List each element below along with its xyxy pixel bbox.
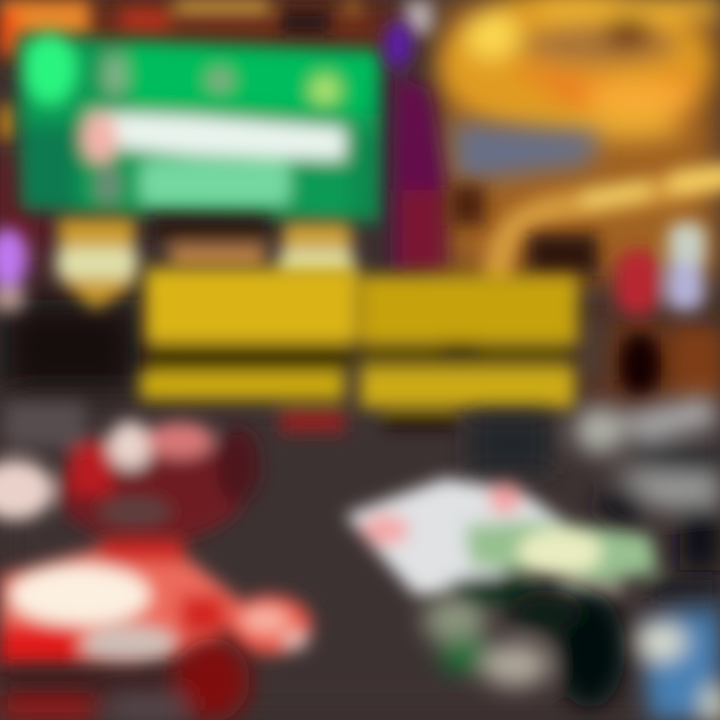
ceiling accents xyxy=(0,0,433,140)
green and white poker table xyxy=(345,478,720,604)
left shield sign xyxy=(56,218,138,310)
red and white poker table, upper xyxy=(0,402,260,542)
dark chair and chips xyxy=(423,590,625,708)
grey tables at right xyxy=(470,395,720,570)
bottom-left dark chair and strips xyxy=(0,638,250,720)
banner lettering glow xyxy=(82,112,345,205)
purple light xyxy=(0,228,28,312)
purple column xyxy=(384,21,445,270)
grey panel xyxy=(452,122,600,182)
green banner xyxy=(18,32,382,222)
yellow sign xyxy=(140,268,578,432)
blue table corner xyxy=(634,600,720,720)
gold arch xyxy=(498,176,720,275)
right shield sign xyxy=(278,222,354,280)
dark gap and salmon band above sign xyxy=(150,218,270,267)
doorway and figures xyxy=(450,185,720,397)
gold ceiling fixture xyxy=(440,0,720,140)
red and white poker table, lower xyxy=(0,538,312,670)
